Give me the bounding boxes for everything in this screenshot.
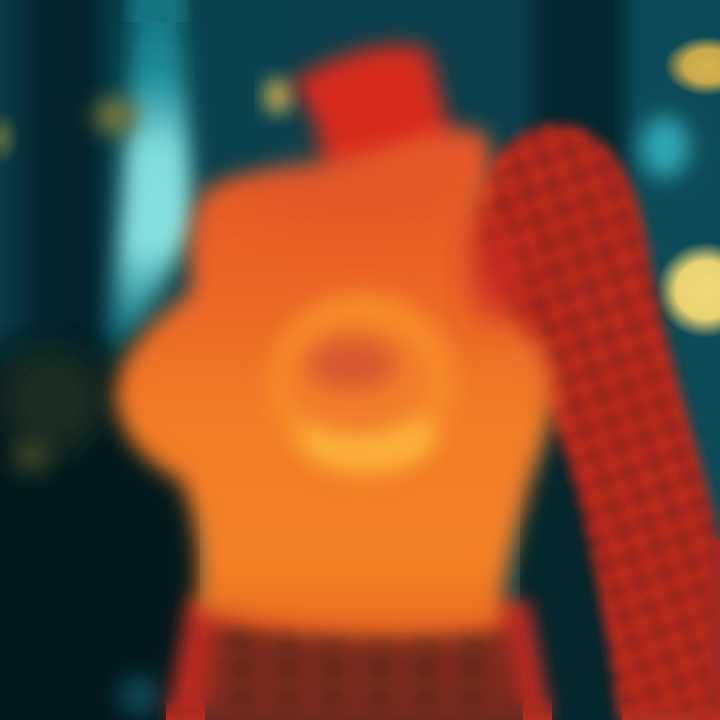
neck bbox=[292, 45, 455, 180]
ring: center darker spot bbox=[308, 338, 396, 390]
torso bbox=[116, 129, 553, 635]
ring: lower yellow crescent bbox=[300, 406, 436, 470]
ring: inner orange bbox=[286, 322, 430, 434]
shadow: sleeve to torso edge bbox=[469, 225, 521, 325]
light: top right yellow bbox=[660, 34, 720, 98]
foliage: highlight bbox=[12, 440, 52, 472]
ring: chest glow bbox=[270, 293, 454, 477]
teal glow: bottom left floor bbox=[120, 676, 160, 716]
light: far left bbox=[0, 108, 20, 168]
sleeve bbox=[458, 124, 720, 720]
light: right cyan bbox=[640, 116, 690, 178]
foliage: dim left bbox=[2, 350, 102, 450]
light: near neck bbox=[263, 78, 293, 114]
bokeh lights bbox=[0, 34, 720, 472]
skirt bbox=[166, 600, 552, 720]
cyan light column bbox=[110, 0, 194, 360]
light: left olive bbox=[94, 98, 138, 134]
shading: upper chest bbox=[250, 159, 470, 231]
light: right pale yellow bbox=[654, 240, 720, 340]
